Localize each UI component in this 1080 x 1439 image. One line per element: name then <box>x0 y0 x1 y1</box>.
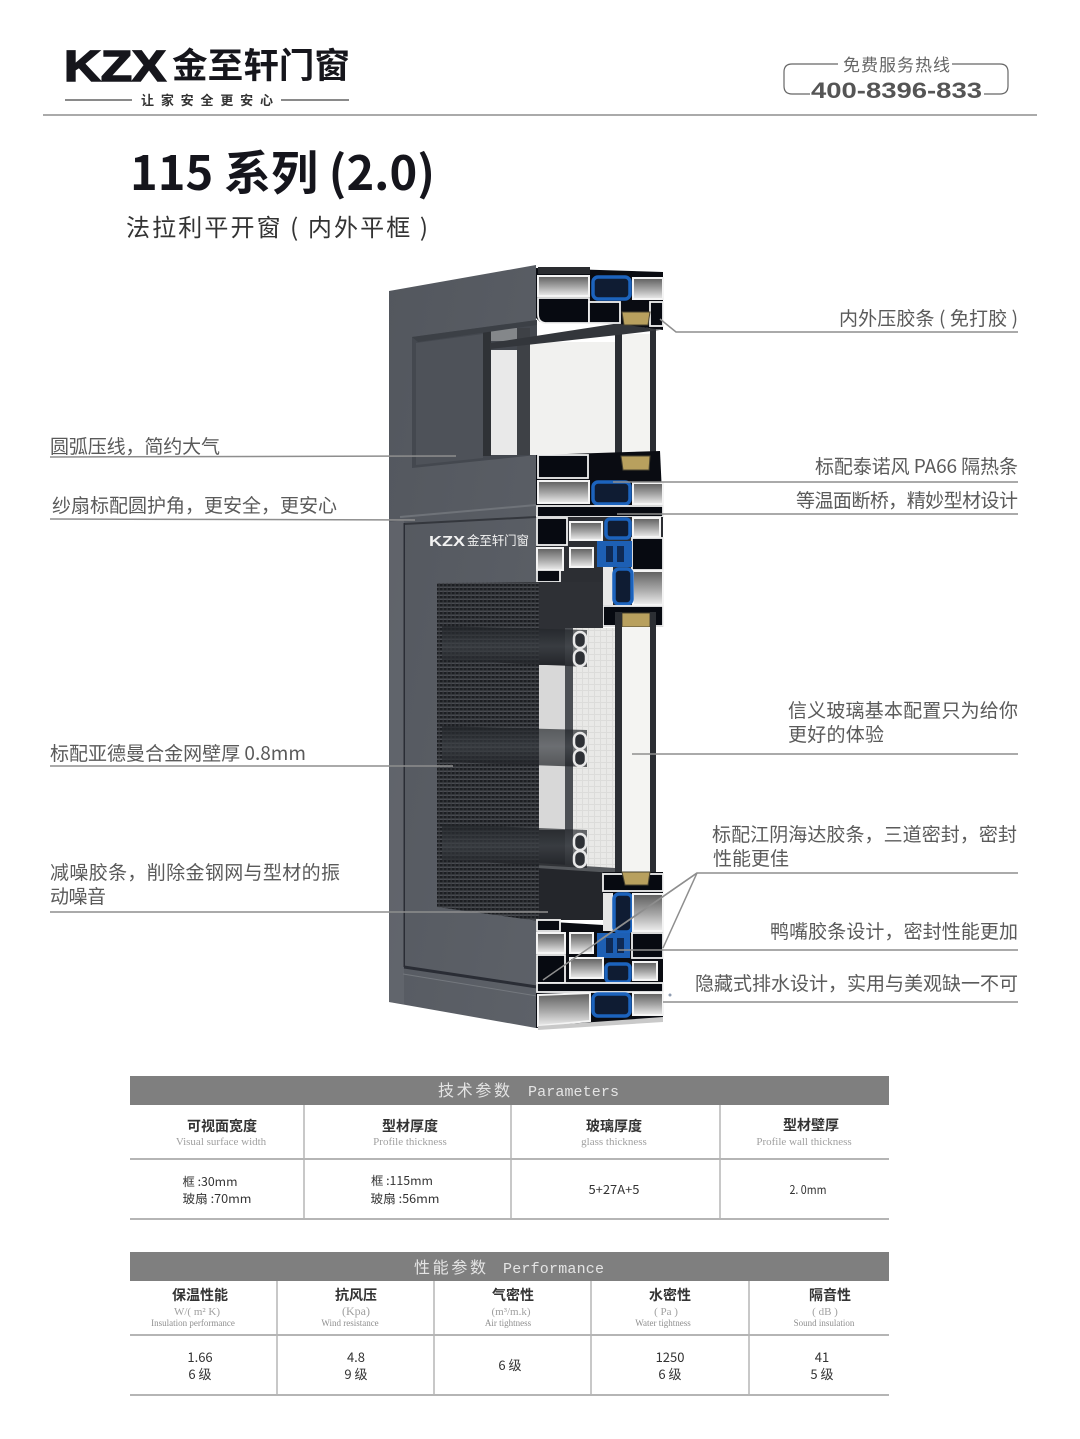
column: visible face width: Visual surface width <box>176 1136 267 1148</box>
callout: triple seal: 性能更佳 <box>713 844 789 871</box>
front logo <box>429 530 529 550</box>
parameters heading bar: Parameters <box>528 1084 619 1101</box>
logo: 让家安全更安心 <box>141 90 273 109</box>
column: visible face width: 玻扇 :70mm <box>182 1190 252 1207</box>
callout: hidden drainage: 隐藏式排水设计，实用与美观缺一不可 <box>695 969 1018 996</box>
column: glass thickness: 5+27A+5 <box>588 1181 640 1198</box>
column: visible face width: 框 :30mm <box>182 1173 238 1190</box>
callout: triple seal <box>543 820 1018 980</box>
front logo: 金至轩门窗 <box>467 530 529 549</box>
callout: screen sash corners: 纱扇标配圆护角，更安全，更安心 <box>52 491 337 518</box>
column: wall thickness: Profile wall thickness <box>756 1136 852 1148</box>
callout: duckbill gasket: 鸭嘴胶条设计，密封性能更加 <box>770 917 1018 944</box>
callout: noise reduction strip: 减噪胶条，削除金钢网与型材的振 <box>50 858 340 885</box>
parameters heading bar <box>130 1076 889 1105</box>
hotline box: 免费服务热线 <box>843 51 950 76</box>
column: sound insulation: Sound insulation <box>794 1318 855 1328</box>
subtitle: 法拉利平开窗 ( 内外平框 ) <box>126 208 428 243</box>
column: visible face width: 可视面宽度 <box>187 1116 257 1136</box>
callout: isotherm thermal break: 等温面断桥，精妙型材设计 <box>796 486 1018 513</box>
column: insulation: 1.66 <box>187 1347 213 1366</box>
column: air tightness: 6 级 <box>498 1355 522 1374</box>
callout: noise reduction strip <box>50 858 548 912</box>
top profile <box>536 267 663 330</box>
column: air tightness: (m³/m.k) <box>491 1306 531 1318</box>
column: profile thickness: 框 :115mm <box>371 1172 433 1189</box>
column: glass thickness: glass thickness <box>581 1136 647 1148</box>
column: wall thickness: 2. 0mm <box>790 1181 826 1198</box>
column: wind resistance <box>321 1285 379 1383</box>
column: air tightness: 气密性 <box>492 1285 534 1305</box>
column: profile thickness: 玻扇 :56mm <box>370 1190 440 1207</box>
screen rollers <box>442 626 587 868</box>
column: water tightness: ( Pa ) <box>654 1306 678 1318</box>
performance heading bar <box>130 1252 889 1281</box>
callout: inner and outer gasket <box>660 304 1018 332</box>
column: profile thickness: Profile thickness <box>373 1136 447 1148</box>
parameters heading bar: 技术参数 <box>438 1077 510 1101</box>
sash profile <box>536 517 663 627</box>
logo: 金至轩门窗 <box>172 38 350 89</box>
column: water tightness <box>635 1285 691 1383</box>
performance heading bar: 性能参数 <box>414 1254 486 1278</box>
column: sound insulation <box>794 1285 855 1383</box>
column: glass thickness <box>581 1116 647 1198</box>
callout: glass: 更好的体验 <box>788 720 884 747</box>
column: insulation <box>151 1285 235 1383</box>
performance heading bar: Performance <box>503 1261 604 1278</box>
callout: arc bead: 圆弧压线，简约大气 <box>50 432 220 459</box>
column: water tightness: 1250 <box>656 1347 684 1366</box>
callout: glass <box>632 696 1018 754</box>
column: wall thickness <box>756 1115 852 1198</box>
middle transom profile <box>536 451 663 517</box>
insect screen mesh <box>437 582 539 921</box>
hotline box: 400-8396-833 <box>811 78 982 103</box>
column: wind resistance: 抗风压 <box>335 1285 377 1305</box>
column: wall thickness: 型材壁厚 <box>783 1115 839 1135</box>
column: visible face width <box>176 1116 267 1207</box>
callout: alloy mesh: 标配亚德曼合金网壁厚 0.8mm <box>50 739 306 766</box>
column: wind resistance: 4.8 <box>347 1347 365 1366</box>
title: 115 系列 (2.0) <box>130 135 435 204</box>
bottom profile <box>536 872 663 1030</box>
lower glazing <box>537 582 656 920</box>
hotline box <box>784 51 1008 103</box>
table: performance <box>130 1252 889 1395</box>
column: profile thickness: 型材厚度 <box>382 1116 438 1136</box>
upper glazing view <box>412 320 660 468</box>
logo <box>64 38 350 109</box>
logo: KZX <box>64 42 166 91</box>
column: sound insulation: 41 <box>815 1347 829 1366</box>
callout: glass: 信义玻璃基本配置只为给你 <box>788 696 1018 723</box>
front logo: KZX <box>429 533 465 550</box>
column: water tightness: Water tightness <box>635 1318 691 1328</box>
column: wind resistance: 9 级 <box>344 1364 368 1383</box>
column: glass thickness: 玻璃厚度 <box>586 1116 642 1136</box>
callout: noise reduction strip: 动噪音 <box>50 882 106 909</box>
column: sound insulation: 5 级 <box>810 1364 834 1383</box>
column: insulation: 6 级 <box>188 1364 212 1383</box>
column: wind resistance: (Kpa) <box>342 1304 370 1318</box>
callout: triple seal: 标配江阴海达胶条，三道密封，密封 <box>712 820 1017 847</box>
column: air tightness: Air tightness <box>485 1318 532 1328</box>
column: wind resistance: Wind resistance <box>321 1318 379 1328</box>
column: sound insulation: ( dB ) <box>812 1306 838 1318</box>
column: water tightness: 水密性 <box>649 1285 691 1305</box>
table: parameters <box>130 1076 889 1219</box>
column: insulation: W/( m² K) <box>174 1306 220 1318</box>
sash frame lines and rail <box>389 505 537 1004</box>
column: water tightness: 6 级 <box>658 1364 682 1383</box>
window cross-section illustration <box>389 265 663 1030</box>
column: sound insulation: 隔音性 <box>809 1285 851 1305</box>
callout: inner and outer gasket: 内外压胶条 ( 免打胶 ) <box>839 304 1018 331</box>
column: insulation: 保温性能 <box>172 1285 228 1305</box>
column: profile thickness <box>370 1116 447 1207</box>
column: air tightness <box>485 1285 534 1374</box>
column: insulation: Insulation performance <box>151 1318 235 1328</box>
callout: PA66 thermal strip: 标配泰诺风 PA66 隔热条 <box>815 452 1018 479</box>
front face of frame <box>389 265 536 1028</box>
